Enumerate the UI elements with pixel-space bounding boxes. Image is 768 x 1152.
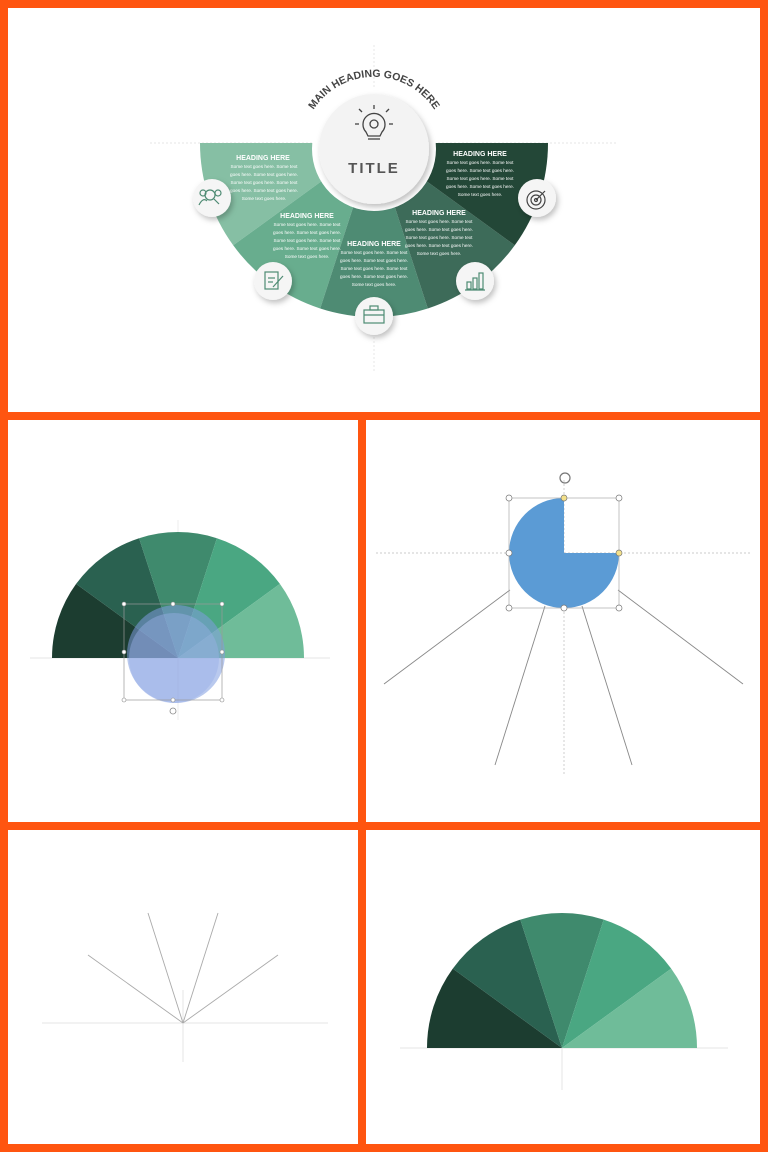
text block 1: goes here. Some text goes here.	[230, 188, 298, 193]
text block 3: Some text goes here. Some text	[341, 266, 408, 271]
chart: semicircle slices	[200, 143, 548, 317]
icon: bar chart	[456, 262, 494, 300]
icon: briefcase	[355, 297, 393, 335]
text block 5: Some text goes here. Some text	[447, 176, 514, 181]
text block 2: Some text goes here. Some text	[274, 238, 341, 243]
text block 1: Some text goes here. Some text	[231, 180, 298, 185]
text block 2	[273, 213, 341, 259]
text block 3: Some text goes here. Some text	[341, 250, 408, 255]
panel: top infographic	[8, 8, 760, 412]
center circle with title	[312, 87, 436, 211]
panel: radiating lines	[8, 830, 358, 1144]
text block 4: HEADING HERE	[412, 210, 466, 217]
text block 1	[230, 155, 298, 201]
text block 5: HEADING HERE	[453, 151, 507, 158]
text block 2: HEADING HERE	[280, 213, 334, 220]
text block 4: Some text goes here. Some text	[406, 219, 473, 224]
text block 4: Some text goes here.	[417, 251, 461, 256]
text block 1: HEADING HERE	[236, 155, 290, 162]
text block 5: goes here. Some text goes here.	[446, 168, 514, 173]
text block 5	[446, 151, 514, 197]
panel: final semicircle	[366, 830, 760, 1144]
text block 2: Some text goes here.	[285, 254, 329, 259]
text block 3: goes here. Some text goes here.	[340, 258, 408, 263]
icon: target	[518, 179, 556, 217]
text block 1: Some text goes here. Some text	[231, 164, 298, 169]
icon: light bulb	[355, 105, 393, 139]
text block 5: goes here. Some text goes here.	[446, 184, 514, 189]
panel: semicircle with overlay	[8, 420, 358, 822]
panel: pie shape with lines	[366, 420, 760, 822]
text block 4: goes here. Some text goes here.	[405, 227, 473, 232]
text block 3: goes here. Some text goes here.	[340, 274, 408, 279]
text block 2: goes here. Some text goes here.	[273, 246, 341, 251]
blue three-quarter pie	[509, 498, 619, 608]
text block 5: Some text goes here. Some text	[447, 160, 514, 165]
text block 3	[340, 241, 408, 287]
text block 5: Some text goes here.	[458, 192, 502, 197]
blue overlay circles	[122, 602, 225, 714]
text block 3: Some text goes here.	[352, 282, 396, 287]
text block 2: Some text goes here. Some text	[274, 222, 341, 227]
text block 1: Some text goes here.	[242, 196, 286, 201]
icon: clipboard	[254, 262, 292, 300]
text block 4: Some text goes here. Some text	[406, 235, 473, 240]
text block 4: goes here. Some text goes here.	[405, 243, 473, 248]
title text: TITLE	[348, 160, 400, 177]
main heading curved: MAIN HEADING GOES HERE	[308, 70, 440, 110]
text block 1: goes here. Some text goes here.	[230, 172, 298, 177]
text block 2: goes here. Some text goes here.	[273, 230, 341, 235]
icon: people search	[193, 179, 231, 217]
text block 3: HEADING HERE	[347, 241, 401, 248]
text block 4	[405, 210, 473, 256]
